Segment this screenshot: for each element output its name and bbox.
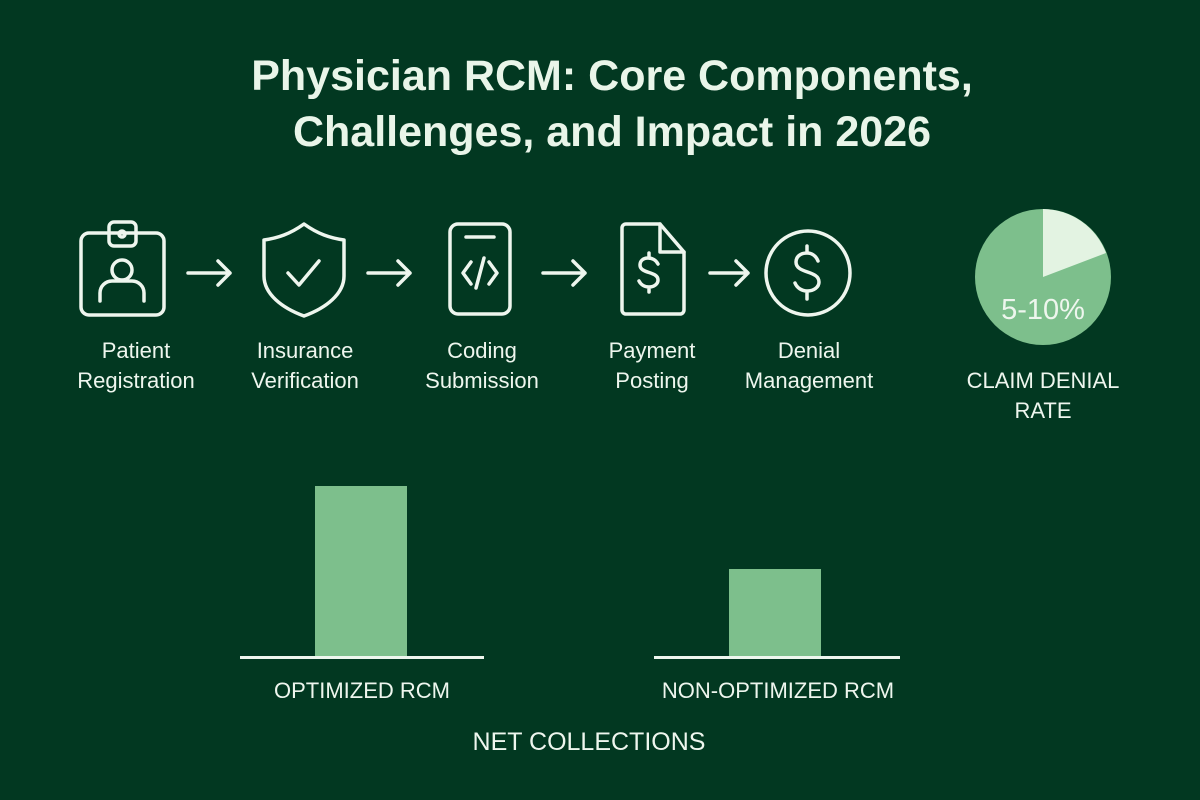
pie chart: claim denial rate: 5-10%	[1001, 294, 1085, 326]
text: Management	[745, 368, 873, 393]
chart caption: NET COLLECTIONS	[473, 728, 705, 756]
text: NON-OPTIMIZED RCM	[662, 678, 894, 703]
bar labels: OPTIMIZED RCM	[274, 678, 450, 703]
step labels	[77, 338, 195, 393]
pie chart: claim denial rate	[975, 209, 1111, 345]
text: Coding	[447, 338, 517, 363]
icon: invoice document	[622, 224, 684, 314]
arrow	[188, 261, 230, 285]
text: Posting	[615, 368, 689, 393]
text: Verification	[251, 368, 359, 393]
icon: code device	[450, 224, 510, 314]
step labels: Registration	[77, 368, 195, 393]
pie label: RATE	[1014, 398, 1072, 423]
arrow	[543, 261, 585, 285]
icon: shield check	[264, 224, 344, 316]
icon: dollar coin	[766, 231, 850, 315]
icon: patient badge	[81, 222, 164, 315]
arrow	[710, 261, 748, 285]
text: Denial	[778, 338, 840, 363]
title: Physician RCM: Core Components,	[251, 52, 973, 100]
title: Challenges, and Impact in 2026	[293, 108, 931, 156]
text: Payment	[609, 338, 695, 363]
pie label: CLAIM DENIAL	[967, 368, 1119, 393]
text: Submission	[425, 368, 539, 393]
step labels: Patient	[102, 338, 170, 363]
title	[251, 52, 973, 156]
text: Insurance	[257, 338, 353, 363]
pie label	[967, 368, 1119, 423]
arrow	[368, 261, 410, 285]
